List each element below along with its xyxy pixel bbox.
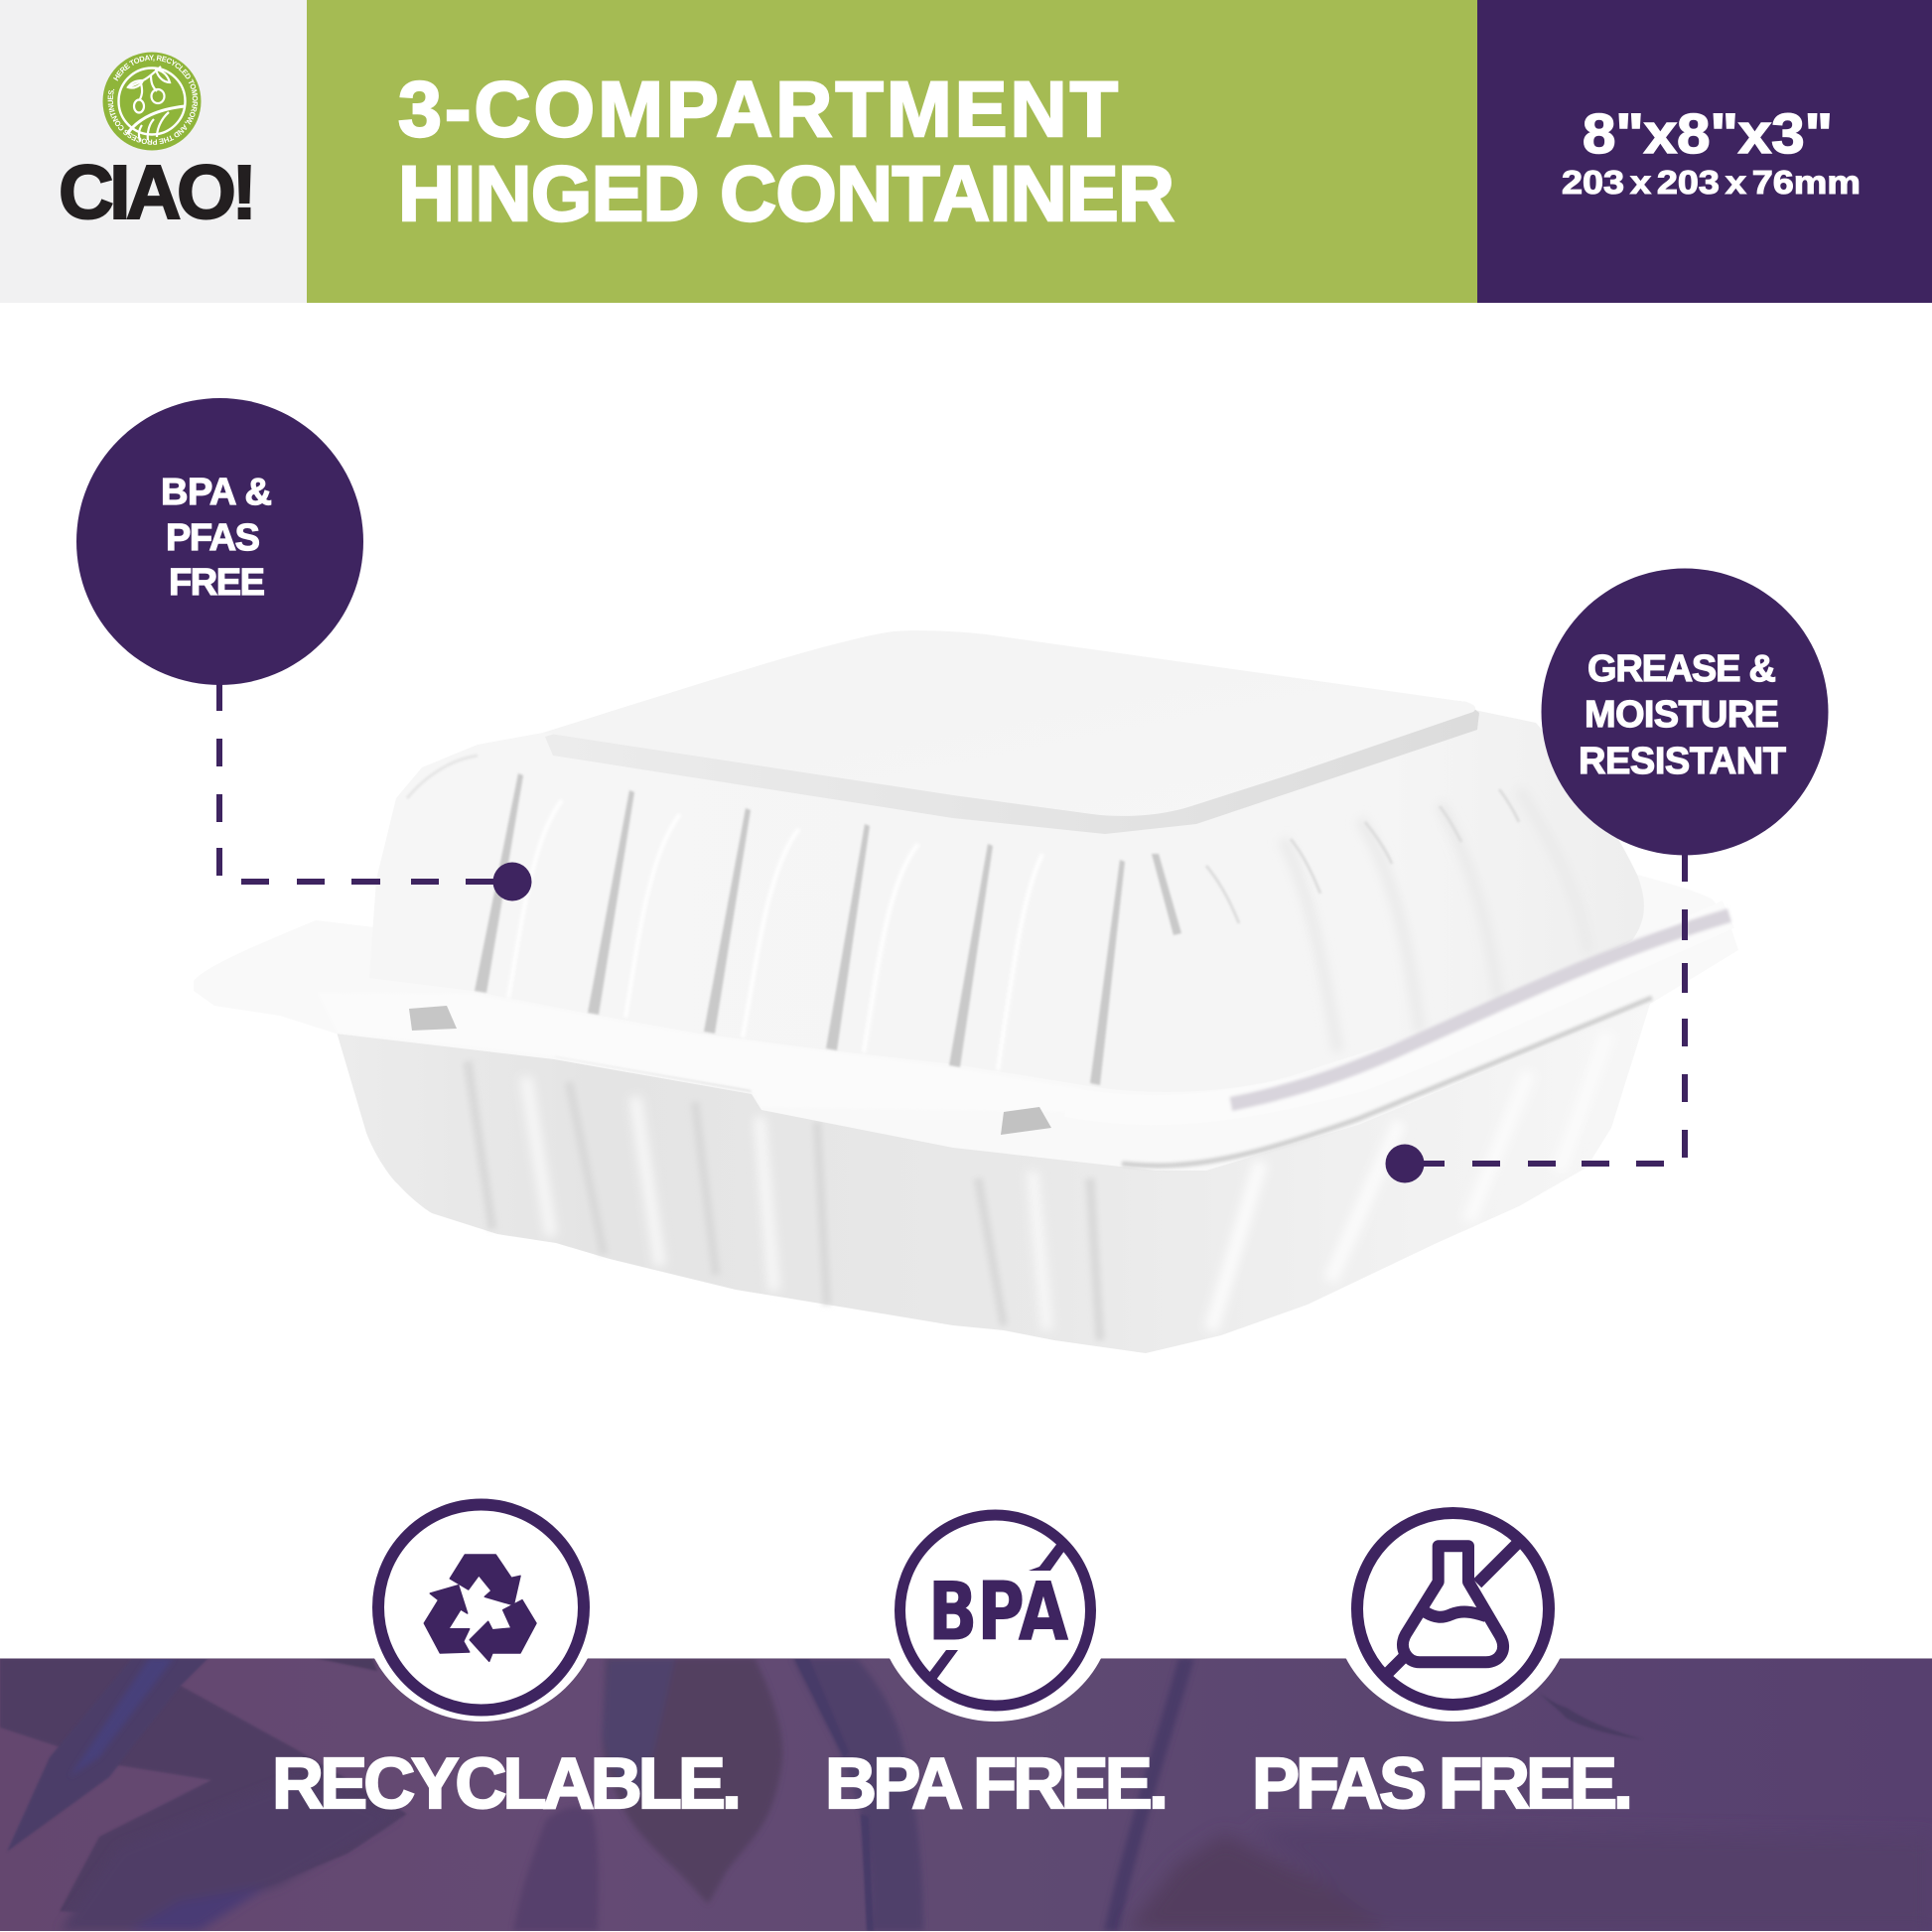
rim tube highlight xyxy=(1067,914,1729,1110)
recycle arrows xyxy=(424,1555,536,1661)
arrow: dashed leader left xyxy=(216,684,532,901)
lower left leaf xyxy=(513,1807,599,1931)
container base tray xyxy=(336,998,1652,1353)
callout: BPA and PFAS free: BPA & xyxy=(161,472,272,513)
rim strap left xyxy=(318,993,1082,1112)
dimensions in inches: 8"x8"x3" xyxy=(1583,102,1833,166)
icon: PFAS free flask xyxy=(1334,1496,1573,1722)
container hinge rim xyxy=(194,875,1738,1171)
dome ribs xyxy=(475,773,1181,1085)
label: recyclable: RECYCLABLE. xyxy=(272,1744,742,1824)
callout: grease and moisture resistant: GREASE & xyxy=(1587,648,1776,690)
panel: logo header block xyxy=(0,0,307,303)
BPA lettering: BPA xyxy=(928,1566,1068,1658)
central leaf xyxy=(603,1658,782,1904)
leaf blade stripe xyxy=(7,1658,208,1852)
small leaf streak right xyxy=(1547,1698,1632,1737)
label: PFAS free: PFAS FREE. xyxy=(1252,1744,1633,1824)
callout: grease and moisture resistant xyxy=(1386,568,1829,1183)
icon: recyclable xyxy=(361,1493,600,1722)
right stem xyxy=(1104,1658,1194,1931)
icon: circular green logo badge: HERE TODAY, RECYCLED TOMORROW, AND THE PROCESS CONTINUES. xyxy=(107,55,199,145)
panel: green title banner xyxy=(307,0,1477,303)
callout: BPA and PFAS free: FREE xyxy=(169,562,265,604)
panel: purple dimensions block xyxy=(1477,0,1932,303)
label: BPA free: BPA FREE. xyxy=(825,1744,1169,1824)
callout: grease and moisture resistant: MOISTURE xyxy=(1585,694,1779,736)
callout: grease and moisture resistant: RESISTANT xyxy=(1579,741,1786,782)
title: HINGED CONTAINER xyxy=(398,149,1174,237)
product: white hinged container xyxy=(194,630,1738,1353)
dimensions in millimetres: 203 x 203 x 76mm xyxy=(1562,164,1861,201)
arrow: dashed leader right xyxy=(1386,854,1688,1183)
panel: purple leaf footer band xyxy=(0,1658,1932,1931)
title: 3-COMPARTMENT xyxy=(398,65,1118,153)
container dome lid xyxy=(369,645,1644,1092)
title xyxy=(398,65,1174,237)
lid top plateau xyxy=(543,630,1479,834)
hinge tab left xyxy=(409,1006,457,1031)
callout: BPA and PFAS free xyxy=(76,398,532,901)
logo wordmark: CIAO! xyxy=(59,150,257,235)
hinge tab right xyxy=(1001,1107,1051,1135)
icon: BPA free xyxy=(878,1499,1112,1722)
stem strip xyxy=(792,1658,923,1931)
callout: BPA and PFAS free: PFAS xyxy=(166,517,260,559)
